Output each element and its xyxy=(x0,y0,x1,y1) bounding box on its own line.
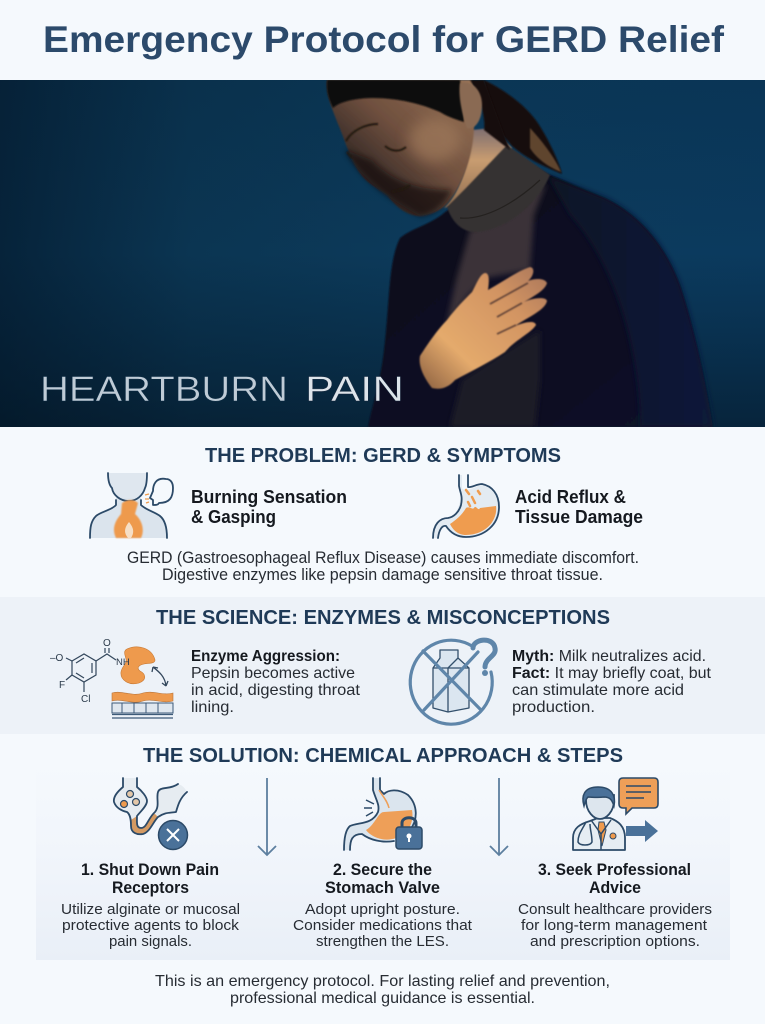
description: GERD (Gastroesophageal Reflux Disease) causes immediate discomfort. xyxy=(127,549,639,567)
panel: the problem xyxy=(90,444,643,584)
arrow: step 2 to 3 xyxy=(490,778,508,855)
icon: enzyme molecule and tissue xyxy=(50,638,173,718)
text: step 1: Utilize alginate or mucosal xyxy=(61,901,240,918)
heading: the solution: THE SOLUTION: CHEMICAL APPROACH & STEPS xyxy=(143,744,623,767)
facial features xyxy=(346,124,410,192)
text: myth and fact: can stimulate more acid xyxy=(512,682,684,699)
text: step 2: Consider medications that xyxy=(293,917,473,934)
text: myth and fact: Myth: Milk neutralizes acid. xyxy=(512,648,706,665)
head xyxy=(327,80,476,216)
description xyxy=(127,549,639,584)
text: step 1: pain signals. xyxy=(109,933,192,950)
text: step 2: 2. Secure the xyxy=(333,861,432,879)
hand xyxy=(420,267,547,389)
heading: the problem: THE PROBLEM: GERD & SYMPTOMS xyxy=(205,444,561,467)
footer note xyxy=(155,973,610,1007)
icon: burning throat xyxy=(90,473,173,538)
text: enzyme aggression xyxy=(191,648,361,716)
ear xyxy=(459,82,482,128)
label: burning sensation xyxy=(191,487,347,527)
text: step 3: Advice xyxy=(589,879,641,897)
hero photo: woman holding chest xyxy=(0,80,765,427)
text: step 1: Receptors xyxy=(112,879,189,897)
icon: doctor with speech bubble xyxy=(573,778,658,850)
right shoulder xyxy=(548,176,713,427)
description: Digestive enzymes like pepsin damage sensitive throat tissue. xyxy=(162,566,603,584)
icon: stomach with acid xyxy=(433,475,499,538)
panel: the solution xyxy=(36,744,730,960)
hero label: HEARTBURN xyxy=(40,369,288,409)
hero label: PAIN xyxy=(305,369,404,409)
icon: enzyme molecule and tissue: F xyxy=(59,680,65,691)
torso xyxy=(368,150,713,427)
text: enzyme aggression: Enzyme Aggression: xyxy=(191,648,340,665)
icon: nerve receptor blocked xyxy=(114,778,188,850)
panel: the science xyxy=(0,597,765,734)
turtleneck xyxy=(447,145,550,232)
text: step 3: Consult healthcare providers xyxy=(518,901,712,918)
text: step 2 xyxy=(293,861,473,950)
text: myth and fact: production. xyxy=(512,699,595,716)
cheek light xyxy=(409,118,461,162)
heading: the science: THE SCIENCE: ENZYMES & MISCONCEPTIONS xyxy=(156,606,610,629)
text: enzyme aggression: lining. xyxy=(191,699,234,716)
icon: crossed-out milk carton xyxy=(410,640,495,724)
ponytail xyxy=(484,80,562,174)
label: acid reflux: Acid Reflux & xyxy=(515,487,626,507)
text: step 1: 1. Shut Down Pain xyxy=(81,861,219,879)
text: step 2: Adopt upright posture. xyxy=(305,901,460,918)
lit chest xyxy=(446,184,546,326)
text: step 3: and prescription options. xyxy=(530,933,700,950)
label: acid reflux xyxy=(515,487,643,527)
text: step 3 xyxy=(518,861,712,950)
arrow: step 1 to 2 xyxy=(258,778,276,855)
icon: enzyme molecule and tissue: Cl xyxy=(81,694,90,705)
footer note: professional medical guidance is essential. xyxy=(230,990,535,1007)
text: myth and fact xyxy=(512,648,712,716)
neck xyxy=(444,128,512,208)
text: step 1: protective agents to block xyxy=(62,917,240,934)
text: enzyme aggression: in acid, digesting throat xyxy=(191,682,361,699)
hero label xyxy=(40,369,404,409)
footer note: This is an emergency protocol. For lasting relief and prevention, xyxy=(155,973,610,990)
text: step 2: strengthen the LES. xyxy=(316,933,449,950)
icon: enzyme molecule and tissue: –O xyxy=(50,653,64,664)
text: enzyme aggression: Pepsin becomes active xyxy=(191,665,355,682)
icon: enzyme molecule and tissue: NH xyxy=(116,657,130,668)
label: acid reflux: Tissue Damage xyxy=(515,507,643,527)
text: myth and fact: Fact: It may briefly coat, but xyxy=(512,665,712,682)
text: step 3: 3. Seek Professional xyxy=(538,861,691,879)
title: Emergency Protocol for GERD Relief xyxy=(43,19,725,60)
text: step 1 xyxy=(61,861,240,950)
lower face shadow xyxy=(345,150,452,216)
icon: stomach valve with lock xyxy=(344,778,422,850)
label: burning sensation: & Gasping xyxy=(191,507,276,527)
label: burning sensation: Burning Sensation xyxy=(191,487,347,507)
text: step 2: Stomach Valve xyxy=(325,879,440,897)
icon: enzyme molecule and tissue: O xyxy=(103,638,111,649)
hair xyxy=(327,80,464,122)
text: step 3: for long-term management xyxy=(521,917,708,934)
